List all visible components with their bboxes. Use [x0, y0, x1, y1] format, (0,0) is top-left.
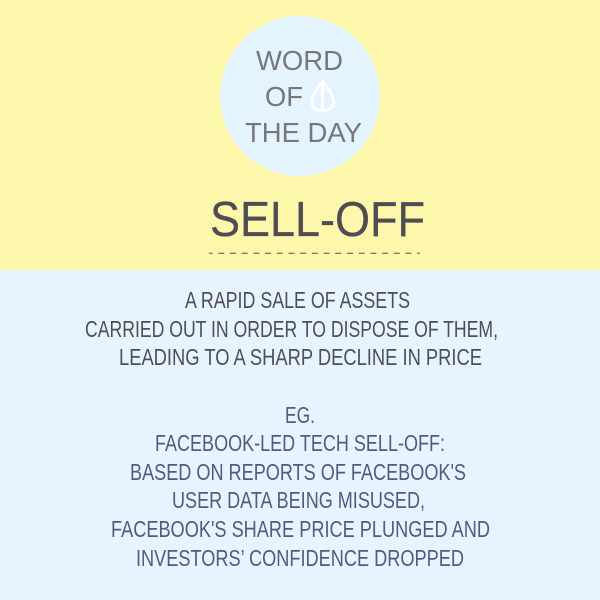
badge: word of the day: WORD: [256, 45, 343, 76]
text block: example: INVESTORS’ CONFIDENCE DROPPED: [136, 545, 464, 571]
text block: example: EG.: [285, 402, 315, 428]
text block: example: BASED ON REPORTS OF FACEBOOK'S: [130, 459, 466, 485]
icon: seed: [312, 81, 334, 110]
badge: word of the day: [220, 16, 380, 176]
text block: definition: A RAPID SALE OF ASSETS: [185, 287, 410, 313]
text block: example: USER DATA BEING MISUSED,: [172, 487, 425, 513]
text block: definition: LEADING TO A SHARP DECLINE IN PRICE: [119, 344, 482, 370]
badge: word of the day: THE DAY: [245, 117, 362, 148]
panel: yellow header: [0, 0, 600, 270]
panel: blue body: [0, 270, 600, 600]
title underline: [209, 252, 420, 254]
text block: example: [111, 402, 490, 571]
text block: definition: [85, 287, 498, 370]
title: SELL-OFF: [210, 193, 425, 247]
badge: word of the day: OF: [265, 81, 303, 112]
text block: example: FACEBOOK-LED TECH SELL-OFF:: [155, 430, 445, 456]
text block: example: FACEBOOK'S SHARE PRICE PLUNGED AND: [111, 516, 490, 542]
